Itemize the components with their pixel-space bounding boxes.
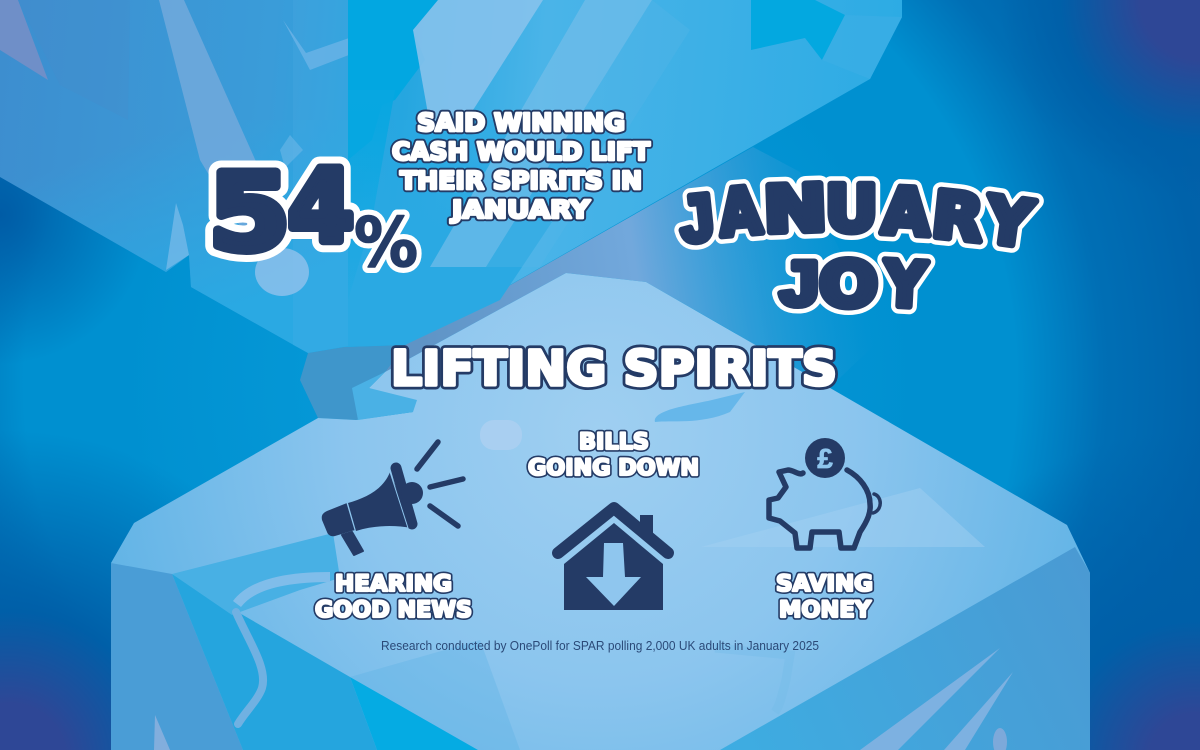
title: january joy: U [825, 173, 878, 247]
labels: icon captions: BILLS [579, 430, 649, 455]
title: january joy [676, 172, 1037, 322]
labels: icon captions: SAVING [776, 572, 873, 597]
text: said winning cash: CASH WOULD LIFT [392, 137, 650, 166]
stat: 54 percent: 5 [209, 152, 290, 274]
stat: 54 percent: 4 [288, 148, 354, 265]
title: january joy: N [762, 172, 829, 248]
title: january joy: Y [980, 183, 1037, 263]
title: january joy: U [825, 173, 878, 247]
stat: 54 percent: % [354, 204, 418, 283]
footnote: research source: Research conducted by OnePoll for SPAR polling 2,000 UK adults in January 2025 [381, 639, 819, 653]
title: january joy: A [880, 175, 932, 251]
title: january joy: Y [881, 247, 929, 322]
icon: piggy bank with pound coin: £ [817, 443, 833, 474]
labels: icon captions: MONEY [779, 598, 872, 623]
labels: icon captions: GOOD NEWS [315, 598, 472, 623]
title: january joy: O [819, 248, 878, 321]
labels: icon captions: MONEY [779, 598, 872, 623]
labels: icon captions: HEARING [335, 572, 452, 597]
title: january joy: J [676, 179, 717, 257]
text: said winning cash: CASH WOULD LIFT [392, 137, 650, 166]
labels: icon captions: SAVING [776, 572, 873, 597]
labels: icon captions: GOING DOWN [528, 456, 699, 481]
text: said winning cash: JANUARY [450, 195, 591, 224]
labels: icon captions: GOOD NEWS [315, 598, 472, 623]
labels: icon captions: BILLS [579, 430, 649, 455]
text: said winning cash: SAID WINNING [417, 108, 625, 137]
heading: lifting spirits: LIFTING SPIRITS [391, 341, 837, 397]
panel: lower light area [111, 273, 1090, 750]
title: january joy: J [676, 179, 717, 257]
title: january joy: A [880, 175, 932, 251]
text: said winning cash: THEIR SPIRITS IN [400, 166, 642, 195]
labels: icon captions: HEARING [335, 572, 452, 597]
labels: icon captions [315, 430, 873, 623]
text: said winning cash: THEIR SPIRITS IN [400, 166, 642, 195]
title: january joy: R [928, 178, 987, 257]
heading: lifting spirits: LIFTING SPIRITS [391, 341, 837, 397]
title: january joy: R [928, 178, 987, 257]
icon: house with down arrow [558, 508, 668, 610]
text: said winning cash [392, 108, 650, 224]
title: january joy: A [716, 174, 765, 252]
title: january joy: J [780, 250, 819, 319]
stat: 54 percent [209, 148, 418, 283]
text: said winning cash: JANUARY [450, 195, 591, 224]
title: january joy: A [716, 174, 765, 252]
stat: 54 percent: % [354, 204, 418, 283]
stat: 54 percent: 4 [288, 148, 354, 265]
title: january joy: N [762, 172, 829, 248]
title: january joy: J [780, 250, 819, 319]
stat: 54 percent: 5 [209, 152, 290, 274]
title: january joy: O [819, 248, 878, 321]
title: january joy: Y [881, 247, 929, 322]
icon: piggy bank with pound coin [769, 438, 880, 548]
title: january joy: Y [980, 183, 1037, 263]
icon: megaphone [322, 442, 463, 555]
labels: icon captions: GOING DOWN [528, 456, 699, 481]
text: said winning cash: SAID WINNING [417, 108, 625, 137]
